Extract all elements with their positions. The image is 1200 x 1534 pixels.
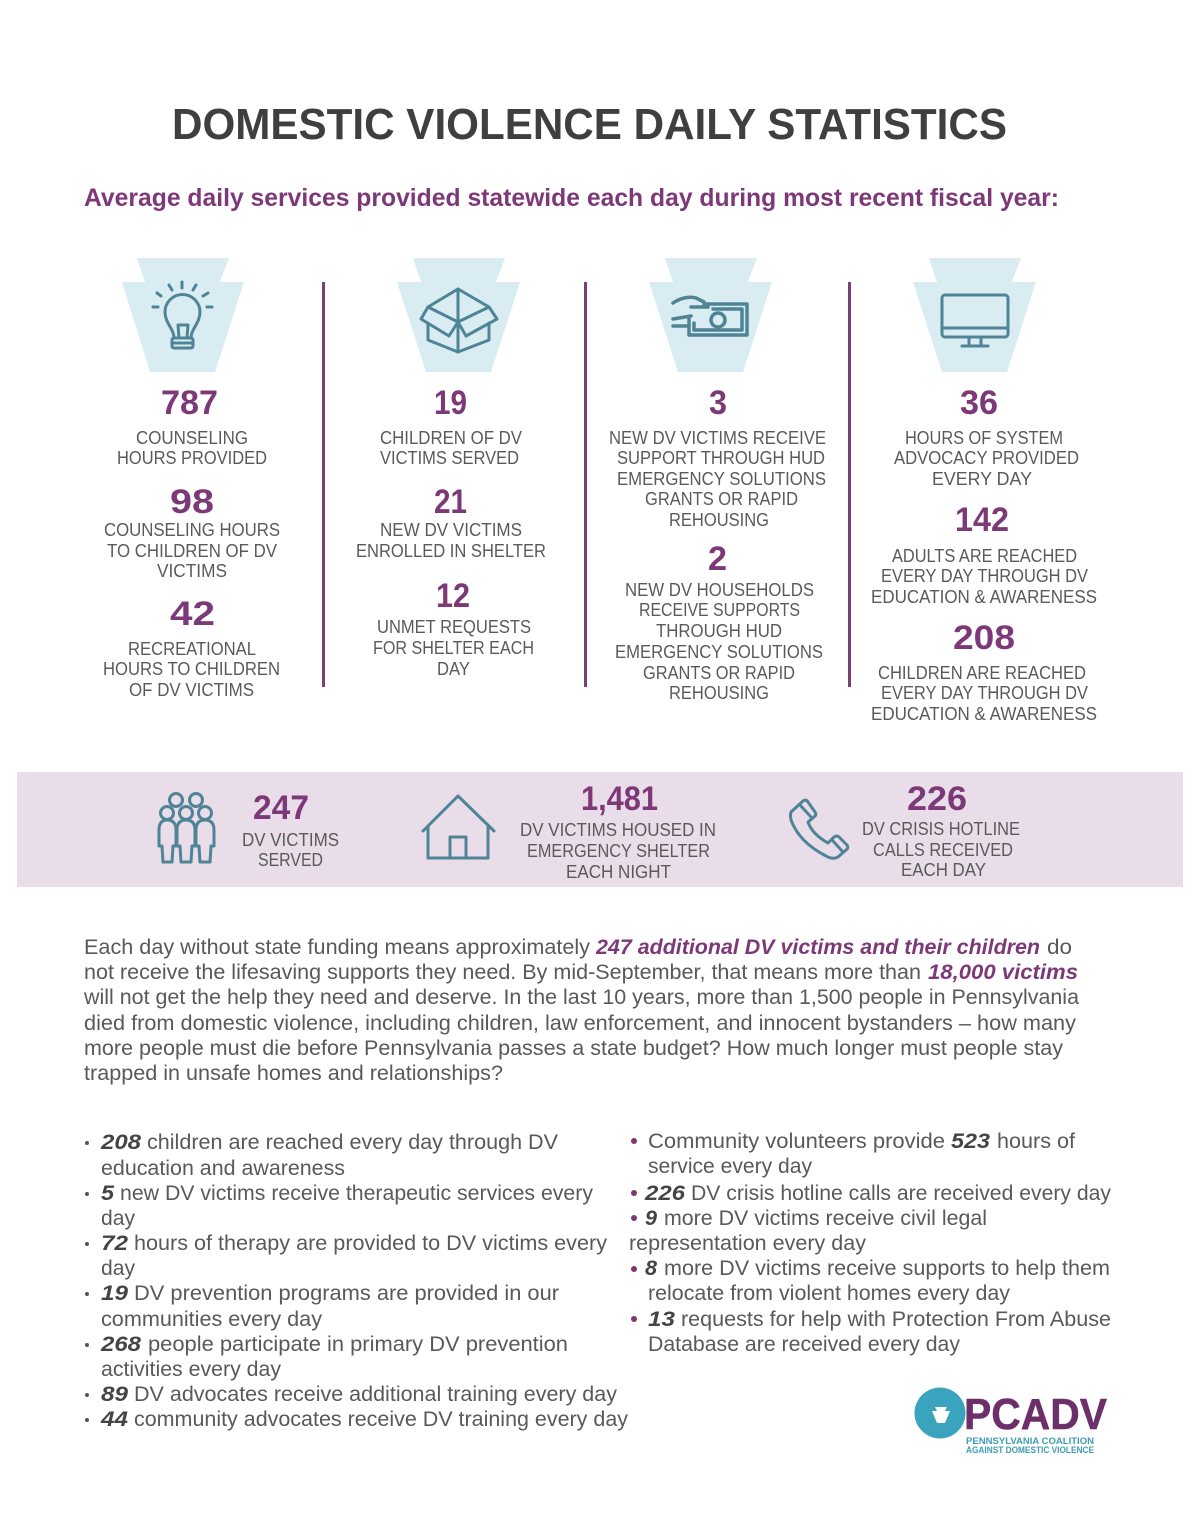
label: counseling to children xyxy=(104,520,280,581)
icon: monitor keystone xyxy=(913,258,1036,372)
label: victims served: SERVED xyxy=(258,850,323,870)
label: emergency solutions victims: SUPPORT THROUGH HUD xyxy=(617,448,825,468)
text block: left bullet list: people participate in primary DV prevention xyxy=(148,1333,568,1356)
text block: left bullet list: children are reached every day through DV xyxy=(147,1131,558,1154)
label: emergency solutions households: NEW DV HOUSEHOLDS xyxy=(625,580,814,600)
subheading: Average daily services provided statewide each day during most recent fiscal year: xyxy=(84,184,1059,212)
label: emergency solutions households: REHOUSING xyxy=(669,683,769,703)
label: emergency shelter: EMERGENCY SHELTER xyxy=(527,841,710,861)
text block: right bullet list: 523 xyxy=(951,1130,990,1153)
label: recreational hours xyxy=(103,639,280,700)
label: children reached: EDUCATION & AWARENESS xyxy=(871,704,1097,724)
label: recreational hours: OF DV VICTIMS xyxy=(129,680,254,700)
stat: 142: 142 xyxy=(955,501,1009,539)
label: recreational hours: HOURS TO CHILDREN xyxy=(103,659,280,679)
text block: funding paragraph xyxy=(83,936,1079,1085)
panel: advocacy column xyxy=(871,258,1097,724)
panel: shelter column xyxy=(356,258,546,679)
text block: funding paragraph: died from domestic violence, including children, law enforcement, and innocent bystanders – how many xyxy=(84,1012,1077,1035)
stat: 3: 3 xyxy=(709,384,727,422)
label: recreational hours: RECREATIONAL xyxy=(128,639,256,659)
text block: funding paragraph: do xyxy=(1047,936,1072,959)
stat: 208: 208 xyxy=(953,619,1015,657)
stat: 19: 19 xyxy=(434,384,467,422)
label: system advocacy: HOURS OF SYSTEM xyxy=(905,428,1063,448)
icon: lightbulb keystone xyxy=(122,258,244,372)
text block: left bullet list: 208 xyxy=(100,1131,141,1154)
text block: right bullet list: 9 xyxy=(645,1207,657,1230)
stat: 12: 12 xyxy=(436,577,470,615)
label: children reached xyxy=(871,663,1097,724)
stat: 98: 98 xyxy=(170,483,214,521)
stat: 42: 42 xyxy=(170,595,215,633)
label: unmet requests: DAY xyxy=(437,659,470,679)
label: children served xyxy=(380,428,522,468)
text block: left bullet list: 44 xyxy=(100,1408,128,1431)
text block: funding paragraph: trapped in unsafe homes and relationships? xyxy=(84,1062,503,1085)
text block: right bullet list: 226 xyxy=(644,1182,685,1205)
label: system advocacy: ADVOCACY PROVIDED xyxy=(894,448,1079,468)
text block: left bullet list: 5 xyxy=(101,1182,114,1205)
label: adults reached: EVERY DAY THROUGH DV xyxy=(881,566,1088,586)
label: unmet requests: UNMET REQUESTS xyxy=(377,617,531,637)
text block: funding paragraph: more people must die before Pennsylvania passes a state budget? How much longer must people stay xyxy=(84,1037,1064,1060)
text block: left bullet list: 72 xyxy=(101,1232,128,1255)
label: counseling hours: HOURS PROVIDED xyxy=(117,448,267,468)
label: counseling to children: VICTIMS xyxy=(157,561,227,581)
text block: funding paragraph: Each day without state funding means approximately xyxy=(84,936,591,959)
label: hotline calls: CALLS RECEIVED xyxy=(873,840,1013,860)
text block: funding paragraph: not receive the lifesaving supports they need. By mid-September, that means more than xyxy=(84,961,921,984)
label: system advocacy xyxy=(894,428,1079,489)
column dividers xyxy=(322,282,851,687)
text block: right bullet list: 13 xyxy=(648,1308,675,1331)
stat: 226: 226 xyxy=(907,780,967,818)
stat: 2: 2 xyxy=(708,540,727,578)
label: enrolled in shelter: NEW DV VICTIMS xyxy=(380,520,522,540)
label: emergency shelter: EACH NIGHT xyxy=(566,862,671,882)
logo: PCADV: PENNSYLVANIA COALITION xyxy=(966,1436,1094,1446)
text block: left bullet list: activities every day xyxy=(101,1358,282,1381)
text block: left bullet list: education and awareness xyxy=(101,1157,345,1180)
label: hotline calls xyxy=(862,819,1020,880)
text block: right bullet list: representation every day xyxy=(629,1232,867,1255)
text block: left bullet list: hours of therapy are provided to DV victims every xyxy=(134,1232,608,1255)
stat: 36: 36 xyxy=(960,384,998,422)
text block: right bullet list: service every day xyxy=(648,1155,812,1178)
text block: left bullet list: 268 xyxy=(100,1333,141,1356)
label: emergency solutions victims: GRANTS OR RAPID xyxy=(645,489,798,509)
panel: housing supports column xyxy=(609,258,826,703)
label: emergency solutions victims: EMERGENCY SOLUTIONS xyxy=(617,469,826,489)
label: victims served: DV VICTIMS xyxy=(242,830,339,850)
title: DOMESTIC VIOLENCE DAILY STATISTICS xyxy=(172,100,1007,149)
icon: phone xyxy=(790,800,848,858)
text block: right bullet list: more DV victims receive supports to help them xyxy=(664,1257,1110,1280)
label: adults reached xyxy=(871,546,1097,607)
text block: right bullet list: Database are received every day xyxy=(648,1333,961,1356)
label: unmet requests xyxy=(373,617,534,679)
text block: left bullet list: DV advocates receive additional training every day xyxy=(134,1383,618,1406)
label: children served: CHILDREN OF DV xyxy=(380,428,522,448)
logo: PCADV: PCADV xyxy=(964,1390,1108,1439)
label: emergency solutions households: EMERGENCY SOLUTIONS xyxy=(615,642,823,662)
text block: right bullet list: DV crisis hotline calls are received every day xyxy=(691,1182,1111,1205)
logo: PCADV: AGAINST DOMESTIC VIOLENCE xyxy=(966,1445,1094,1455)
text block: right bullet list: more DV victims receive civil legal xyxy=(664,1207,987,1230)
label: hotline calls: DV CRISIS HOTLINE xyxy=(862,819,1020,839)
label: children served: VICTIMS SERVED xyxy=(380,448,519,468)
label: counseling hours: COUNSELING xyxy=(136,428,248,448)
label: victims served xyxy=(242,830,339,870)
panel: counseling column xyxy=(103,258,280,700)
text block: right bullet list: relocate from violent homes every day xyxy=(648,1282,1011,1305)
label: enrolled in shelter xyxy=(356,520,546,561)
label: children reached: EVERY DAY THROUGH DV xyxy=(881,683,1088,703)
label: emergency solutions households: THROUGH HUD xyxy=(656,621,782,641)
label: unmet requests: FOR SHELTER EACH xyxy=(373,638,534,658)
text block: right bullet list xyxy=(629,1130,1111,1356)
text block: left bullet list: 19 xyxy=(101,1282,128,1305)
label: emergency solutions households: RECEIVE SUPPORTS xyxy=(639,600,800,620)
text block: funding paragraph: 18,000 victims xyxy=(928,961,1078,984)
text block: left bullet list: new DV victims receive therapeutic services every xyxy=(120,1182,593,1205)
stat: 1,481: 1,481 xyxy=(581,780,658,818)
label: adults reached: ADULTS ARE REACHED xyxy=(892,546,1077,566)
label: emergency solutions households xyxy=(615,580,823,703)
text block: left bullet list xyxy=(85,1131,629,1431)
icon: people xyxy=(159,794,214,862)
text block: right bullet list: 8 xyxy=(645,1257,657,1280)
logo: PCADV xyxy=(914,1388,1108,1455)
text block: right bullet list: requests for help with Protection From Abuse xyxy=(681,1308,1111,1331)
text block: left bullet list: day xyxy=(101,1257,136,1280)
label: emergency shelter xyxy=(520,820,716,882)
icon: house xyxy=(423,796,494,858)
label: enrolled in shelter: ENROLLED IN SHELTER xyxy=(356,541,546,561)
text block: funding paragraph: 247 additional DV victims and their children xyxy=(595,936,1040,959)
icon: box keystone xyxy=(397,258,520,372)
text block: right bullet list: Community volunteers provide xyxy=(648,1130,945,1153)
text block: right bullet list: hours of xyxy=(997,1130,1075,1153)
label: emergency solutions victims: REHOUSING xyxy=(669,510,769,530)
label: counseling to children: COUNSELING HOURS xyxy=(104,520,280,540)
text block: funding paragraph: will not get the help they need and deserve. In the last 10 years, more than 1,500 people in Pennsylvania xyxy=(83,986,1079,1009)
text block: left bullet list: community advocates receive DV training every day xyxy=(134,1408,629,1431)
label: hotline calls: EACH DAY xyxy=(901,860,986,880)
label: emergency solutions households: GRANTS OR RAPID xyxy=(643,663,795,683)
icon: money keystone xyxy=(649,258,772,372)
stat: 247: 247 xyxy=(253,789,309,827)
label: system advocacy: EVERY DAY xyxy=(932,469,1032,489)
stat: 787: 787 xyxy=(161,384,218,422)
label: emergency solutions victims: NEW DV VICTIMS RECEIVE xyxy=(609,428,826,448)
stat: 21: 21 xyxy=(434,483,467,521)
text block: left bullet list: 89 xyxy=(101,1383,128,1406)
panel: summary band xyxy=(17,772,1183,887)
text block: left bullet list: DV prevention programs are provided in our xyxy=(134,1282,559,1305)
text block: left bullet list: communities every day xyxy=(101,1308,323,1331)
label: emergency shelter: DV VICTIMS HOUSED IN xyxy=(520,820,716,840)
label: adults reached: EDUCATION & AWARENESS xyxy=(871,587,1097,607)
text block: left bullet list: day xyxy=(101,1207,136,1230)
label: counseling hours xyxy=(117,428,267,468)
label: children reached: CHILDREN ARE REACHED xyxy=(878,663,1086,683)
label: counseling to children: TO CHILDREN OF DV xyxy=(107,541,277,561)
label: emergency solutions victims xyxy=(609,428,826,530)
